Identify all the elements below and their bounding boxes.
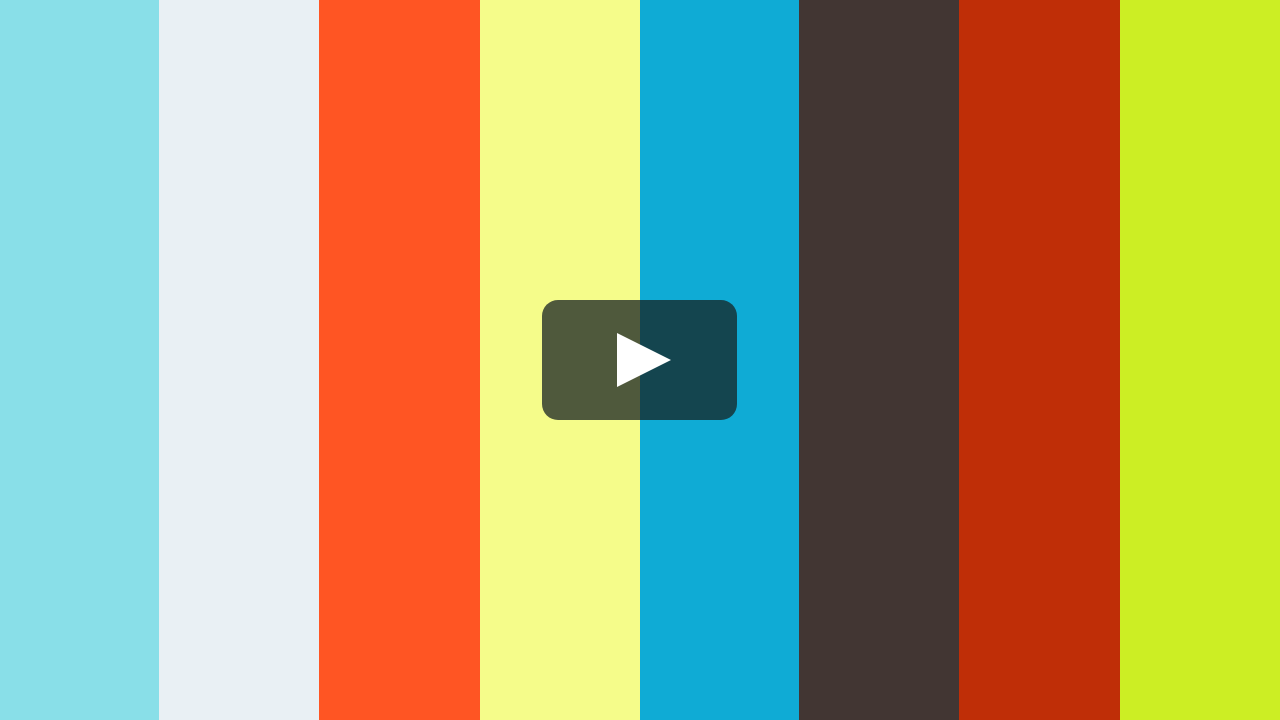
colour bar: lime bbox=[1120, 0, 1280, 720]
colour bar: rust red bbox=[959, 0, 1120, 720]
colour bar: light cyan bbox=[0, 0, 159, 720]
colour bar: orange bbox=[319, 0, 480, 720]
colour bar: dark brown bbox=[799, 0, 959, 720]
play button bbox=[542, 300, 737, 420]
colour bar: pale yellow bbox=[480, 0, 640, 720]
icon: play triangle bbox=[617, 333, 671, 387]
colour bar: pale grey-blue bbox=[159, 0, 319, 720]
colour bar: blue bbox=[640, 0, 799, 720]
